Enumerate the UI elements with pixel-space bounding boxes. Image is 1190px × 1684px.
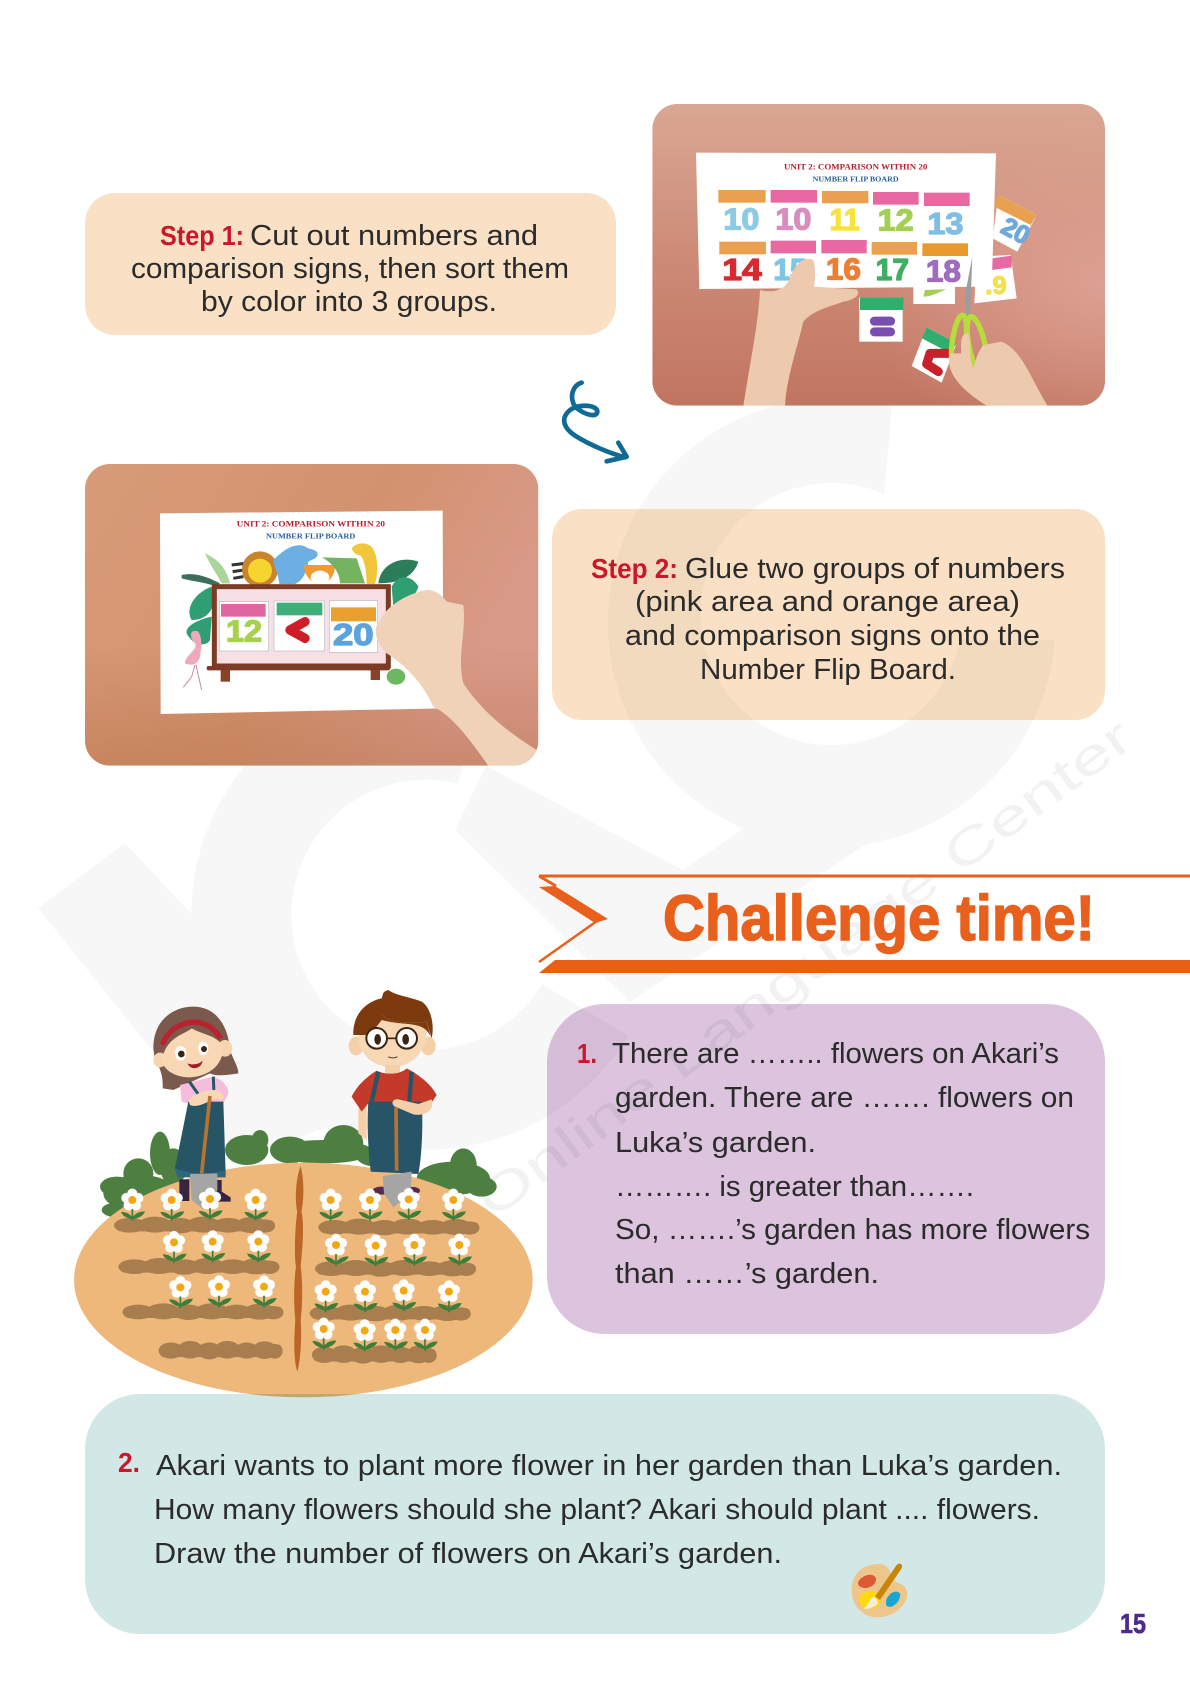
watermark text: Online Language Center [466, 708, 1143, 1229]
step 1 text: comparison signs, then sort them [131, 253, 569, 285]
number cards row 1: 12 [878, 204, 914, 238]
sheet title: UNIT 2: COMPARISON WITHIN 20 [784, 162, 927, 171]
step 1 text [131, 220, 569, 318]
panel: step 2 [552, 509, 1105, 720]
flamingo [183, 631, 202, 690]
banner chevron [539, 886, 608, 923]
right hand holding scissors [949, 333, 1047, 406]
banner: challenge time [539, 876, 1190, 973]
card less-than [274, 601, 325, 651]
panel: question 1 [547, 1004, 1105, 1334]
number cards row 2: 15 [773, 253, 807, 287]
board frame [207, 587, 390, 682]
question 1 text: There are …….. flowers on Akari’s [612, 1038, 1059, 1070]
question 2 text: Draw the number of flowers on Akari’s garden. [154, 1538, 782, 1570]
step 2 text: and comparison signs onto the [625, 620, 1040, 652]
heading: Challenge time! [663, 882, 1095, 954]
scissors [948, 257, 988, 368]
garden furrows [114, 1217, 479, 1364]
paper sheet [160, 511, 443, 714]
arrow: step 1 to step 2 [564, 383, 627, 461]
question 1 text: than ……’s garden. [615, 1258, 879, 1290]
garden divider [294, 1166, 303, 1372]
number cards row 2 [719, 240, 968, 282]
watermark: upper C ring [608, 399, 1055, 847]
hand pressing card [376, 590, 537, 766]
question 2 number: 2. [118, 1447, 140, 1478]
illustration: children and flower garden [74, 990, 533, 1397]
number cards row 1: 10 [723, 202, 759, 236]
number cards row 2: 16 [826, 252, 861, 286]
paper sheet [696, 153, 996, 289]
zoo animals [230, 543, 377, 587]
step 1 label: Step 1: [160, 220, 244, 251]
step 1 text: Cut out numbers and [250, 220, 538, 252]
girl [153, 1007, 238, 1209]
bushes [100, 1125, 497, 1217]
sheet subtitle: NUMBER FLIP BOARD [813, 174, 899, 183]
loose card 19 [974, 255, 1017, 303]
banner top line [539, 876, 1190, 886]
page number: 15 [1120, 1608, 1146, 1639]
flowers: Akari's garden, left [121, 1188, 277, 1308]
number cards row 1: 13 [927, 207, 963, 241]
sheet title: UNIT 2: COMPARISON WITHIN 20 [237, 519, 385, 528]
question 1 text: ………. is greater than……. [615, 1171, 974, 1203]
card 20: 20 [333, 618, 374, 652]
card 20 [329, 601, 378, 652]
card 12 [219, 602, 269, 651]
step 1 text: by color into 3 groups. [201, 286, 497, 318]
flowers: Luka's garden, right [312, 1188, 472, 1351]
card 12: 12 [226, 615, 262, 649]
equals card [859, 297, 903, 342]
question 2 text: Akari wants to plant more flower in her garden than Luka’s garden. [156, 1450, 1062, 1482]
photo: number flip board [85, 464, 538, 766]
step 2 label: Step 2: [591, 553, 678, 584]
step 1 box [85, 193, 616, 335]
question 1 box [547, 1004, 1105, 1334]
step 2 text: Number Flip Board. [700, 654, 956, 686]
photo background [85, 464, 538, 766]
background watermark logo [38, 399, 1143, 1229]
jungle leaves [182, 553, 418, 644]
boy [349, 990, 437, 1207]
number cards row 1: 10 [775, 202, 811, 236]
question 1 text: Luka’s garden. [615, 1127, 816, 1159]
less-than card [912, 327, 957, 383]
frog [387, 669, 405, 685]
loose card 19: .9 [985, 272, 1007, 300]
number cards row 1 [718, 190, 970, 235]
left hand holding sheet [743, 259, 858, 406]
loose card 20 [993, 195, 1037, 252]
question 2 box [85, 1394, 1105, 1634]
watermark: left diagonal stroke [38, 843, 345, 1160]
question 1 number: 1. [577, 1038, 597, 1069]
number cards row 1: 11 [830, 203, 860, 237]
soil ground [74, 1163, 533, 1397]
question 2 text [154, 1450, 1062, 1570]
icon: paint palette [852, 1564, 907, 1617]
sheet subtitle: NUMBER FLIP BOARD [266, 532, 355, 541]
question 1 text [612, 1038, 1090, 1290]
banner bottom band [539, 960, 1190, 973]
question 1 text: garden. There are ……. flowers on [615, 1082, 1074, 1114]
number cards row 2: 18 [926, 255, 961, 289]
panel: question 2 [85, 1394, 1105, 1634]
number cards row 2: 17 [876, 253, 909, 287]
step 2 text: Glue two groups of numbers [685, 553, 1065, 585]
watermark: middle diagonal stroke [455, 766, 884, 1002]
step 2 text [625, 553, 1065, 686]
photo: cutting out numbers [652, 104, 1105, 406]
loose card 20: 20 [996, 212, 1034, 250]
step 2 text: (pink area and orange area) [635, 586, 1020, 618]
question 1 text: So, …….’s garden has more flowers [615, 1214, 1090, 1246]
number cards row 2: 14 [722, 253, 762, 287]
panel: step 1 [85, 193, 616, 335]
loose green card [913, 285, 955, 304]
watermark: lower C ring [241, 730, 585, 1100]
photo background [652, 104, 1105, 406]
step 2 box [552, 509, 1105, 720]
question 2 text: How many flowers should she plant? Akari should plant .... flowers. [154, 1494, 1040, 1526]
banner chevron lower arm [539, 921, 597, 962]
